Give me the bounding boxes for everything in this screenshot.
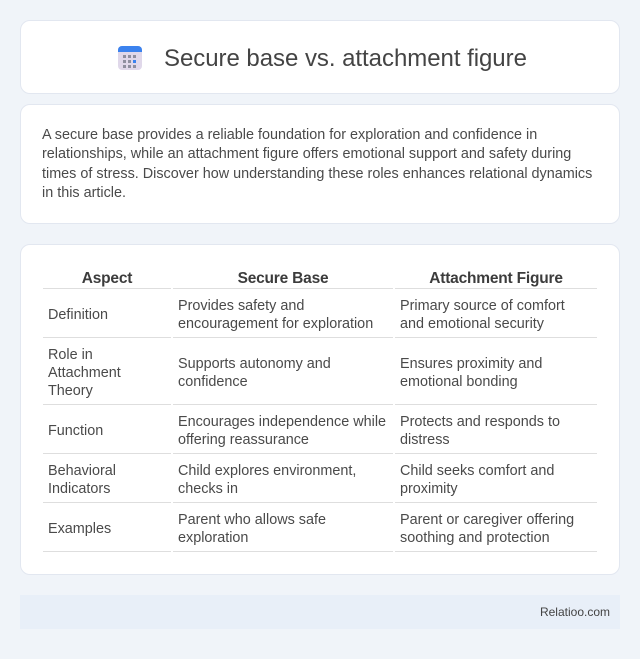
attachment figure definition: and emotional security	[400, 316, 544, 332]
secure base function: offering reassurance	[178, 432, 309, 448]
attachment figure indicators: Child seeks comfort and	[400, 463, 554, 479]
attachment figure definition: Primary source of comfort	[400, 298, 565, 314]
secure base examples: Parent who allows safe	[178, 512, 326, 528]
row: role: Attachment	[48, 365, 121, 381]
title: Secure base vs. attachment figure	[164, 45, 527, 72]
attachment figure role	[400, 356, 542, 390]
intro card	[20, 104, 620, 224]
attachment figure role: Ensures proximity and	[400, 356, 542, 372]
table card	[20, 244, 620, 575]
header: aspect: Aspect	[82, 270, 132, 287]
footer	[20, 595, 620, 629]
attachment figure examples: soothing and protection	[400, 530, 550, 546]
header: attachment figure: Attachment Figure	[429, 270, 563, 287]
intro text	[42, 126, 592, 201]
attachment figure function: Protects and responds to	[400, 414, 560, 430]
intro text: relationships, while an attachment figure offers emotional support and safety during	[42, 146, 571, 162]
footer brand: Relatioo.com	[540, 605, 610, 619]
attachment figure role: emotional bonding	[400, 374, 518, 390]
row: function: Function	[48, 423, 103, 439]
secure base examples	[178, 512, 326, 546]
secure base definition	[178, 298, 373, 332]
row: behavioral indicators	[48, 463, 116, 497]
attachment figure function	[400, 414, 560, 448]
row: behavioral indicators: Indicators	[48, 481, 110, 497]
row: behavioral indicators: Behavioral	[48, 463, 116, 479]
row: role: Role in	[48, 347, 93, 363]
secure base indicators: checks in	[178, 481, 238, 497]
intro text: A secure base provides a reliable foundation for exploration and confidence in	[42, 126, 537, 142]
row: examples: Examples	[48, 521, 111, 537]
intro text: in this article.	[42, 185, 126, 201]
attachment figure indicators	[400, 463, 554, 497]
attachment figure indicators: proximity	[400, 481, 458, 497]
secure base indicators: Child explores environment,	[178, 463, 356, 479]
row: role	[48, 347, 121, 399]
title card	[20, 20, 620, 94]
intro text: times of stress. Discover how understanding these roles enhances relational dynamics	[42, 166, 592, 182]
secure base indicators	[178, 463, 356, 497]
secure base function	[178, 414, 386, 448]
row: role: Theory	[48, 383, 93, 399]
secure base role	[178, 356, 331, 390]
attachment figure function: distress	[400, 432, 450, 448]
attachment figure definition	[400, 298, 565, 332]
secure base role: Supports autonomy and	[178, 356, 331, 372]
secure base function: Encourages independence while	[178, 414, 386, 430]
secure base definition: encouragement for exploration	[178, 316, 373, 332]
header: secure base: Secure Base	[238, 270, 328, 287]
attachment figure examples	[400, 512, 574, 546]
attachment figure examples: Parent or caregiver offering	[400, 512, 574, 528]
row: definition: Definition	[48, 307, 108, 323]
secure base definition: Provides safety and	[178, 298, 304, 314]
secure base examples: exploration	[178, 530, 248, 546]
icon: calendar	[118, 46, 142, 70]
secure base role: confidence	[178, 374, 248, 390]
